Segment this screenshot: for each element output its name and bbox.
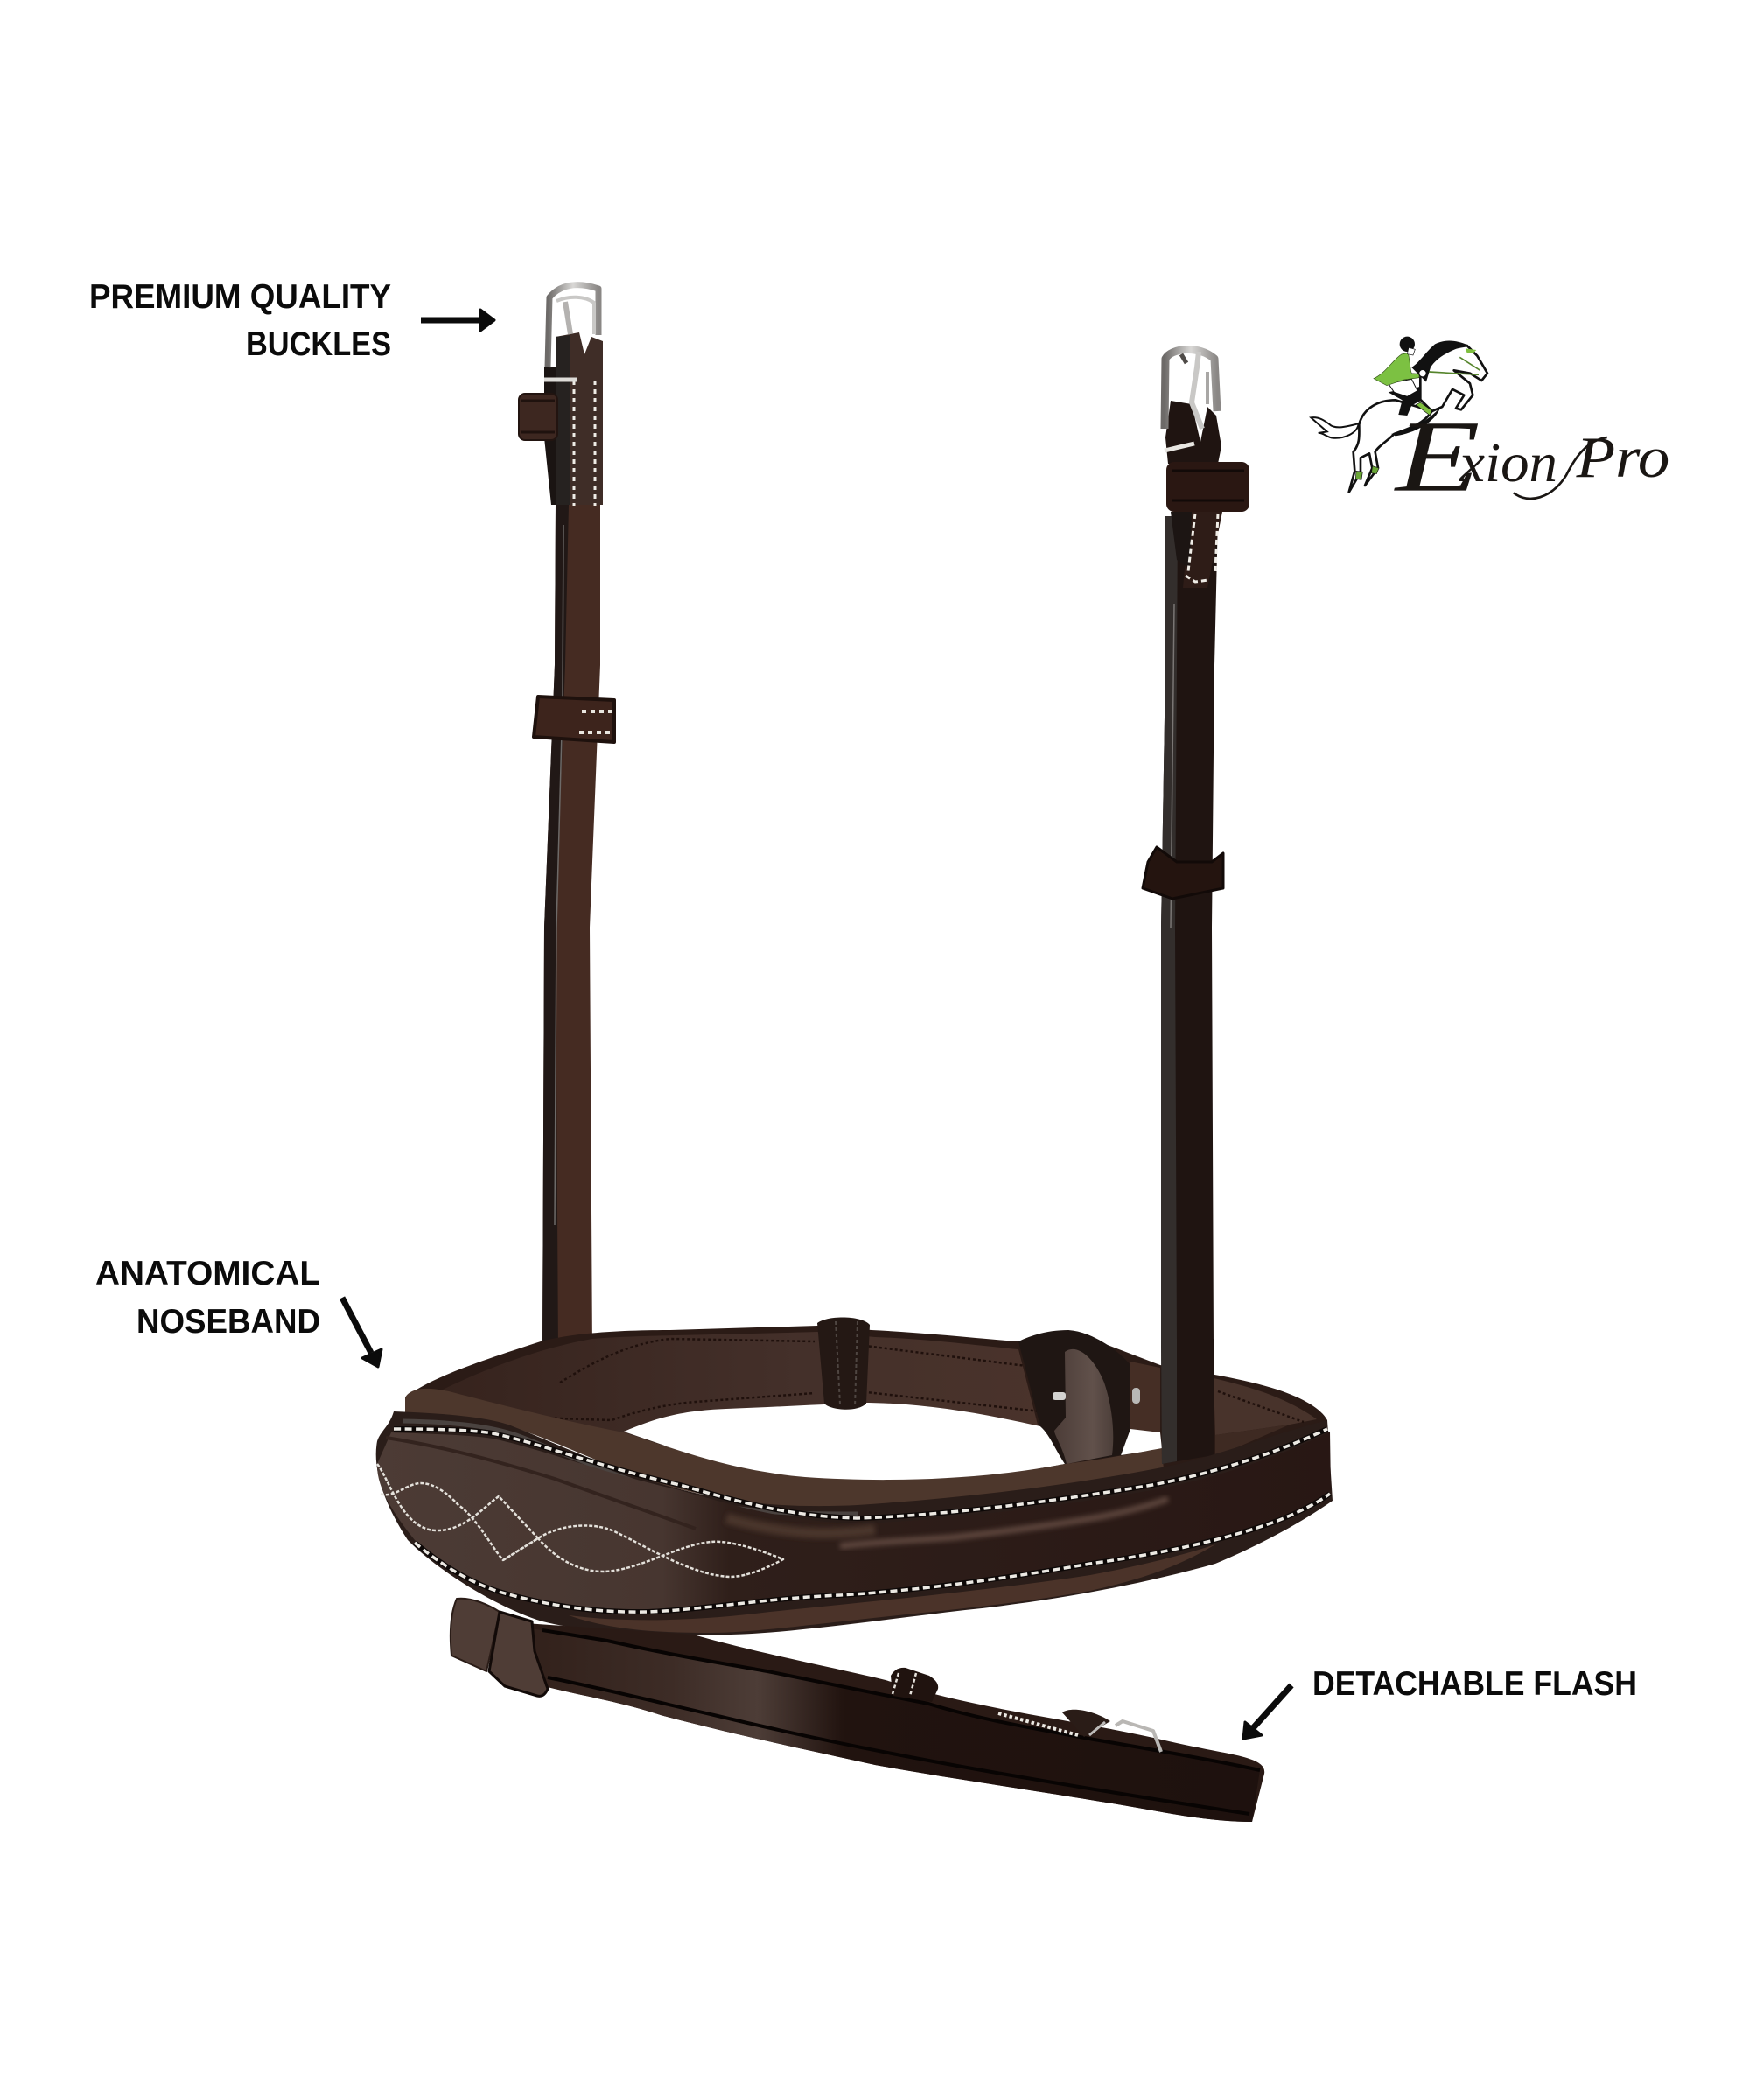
logo: ExionPro (1311, 337, 1670, 514)
padded roll (405, 1389, 1164, 1508)
back strap and lining (405, 1326, 1327, 1470)
fancy diamond stitching (377, 1464, 783, 1577)
logo rider (1374, 337, 1426, 416)
leather highlights (726, 1499, 1168, 1546)
logo wordmark: xion (1459, 432, 1558, 494)
middle keeper right (1143, 847, 1223, 899)
right cheek strap (1161, 401, 1222, 1348)
flash front face (516, 1628, 1260, 1822)
right buckle (1165, 349, 1217, 429)
front silhouette (376, 1411, 1333, 1634)
flash edge lines (542, 1630, 1260, 1814)
logo wordmark (1393, 401, 1670, 514)
lower rim (569, 1544, 1215, 1633)
right cheek strap foot (1161, 1339, 1214, 1464)
back keeper (817, 1317, 870, 1410)
white gap right of the buckle tab (1121, 1429, 1162, 1455)
logo horse (1311, 341, 1488, 493)
label: detachable flash: DETACHABLE FLASH (1312, 1665, 1637, 1703)
top keeper right (1166, 462, 1250, 512)
label: anatomical noseband: ANATOMICAL (95, 1255, 320, 1292)
middle keeper left (534, 696, 614, 742)
product: noseband bridle (376, 285, 1333, 1822)
front leather face (377, 1432, 1331, 1609)
grey edge band (402, 1421, 858, 1514)
label: premium quality buckles (89, 278, 391, 363)
top keeper left (519, 394, 557, 440)
left cheek strap (542, 332, 603, 1352)
flash left loop (451, 1599, 500, 1671)
label: premium quality buckles: BUCKLES (246, 326, 391, 363)
arrow: to flash (1243, 1685, 1292, 1739)
label: anatomical noseband: NOSEBAND (136, 1303, 320, 1340)
flash buckle (1062, 1710, 1161, 1752)
arrow: to noseband (342, 1298, 382, 1367)
logo wordmark: E (1393, 401, 1480, 514)
flash back layer (516, 1623, 1264, 1822)
arrow: to buckle (421, 310, 494, 331)
label: premium quality buckles: PREMIUM QUALITY (89, 278, 391, 316)
lower stitching (415, 1494, 1330, 1612)
back strap stitching (534, 1339, 1304, 1422)
label: anatomical noseband (95, 1255, 320, 1340)
upper stitching (394, 1429, 1327, 1518)
logo wordmark: Pro (1576, 426, 1670, 490)
flash strap (451, 1599, 1264, 1822)
noseband band (376, 1317, 1333, 1634)
left buckle (548, 285, 598, 368)
white opening through the noseband (624, 1403, 1065, 1480)
flash small keeper (891, 1668, 938, 1702)
flash stitching (998, 1713, 1078, 1735)
panel edge crease (386, 1438, 696, 1529)
buckle tab (1018, 1330, 1140, 1464)
flash keeper (489, 1612, 548, 1696)
